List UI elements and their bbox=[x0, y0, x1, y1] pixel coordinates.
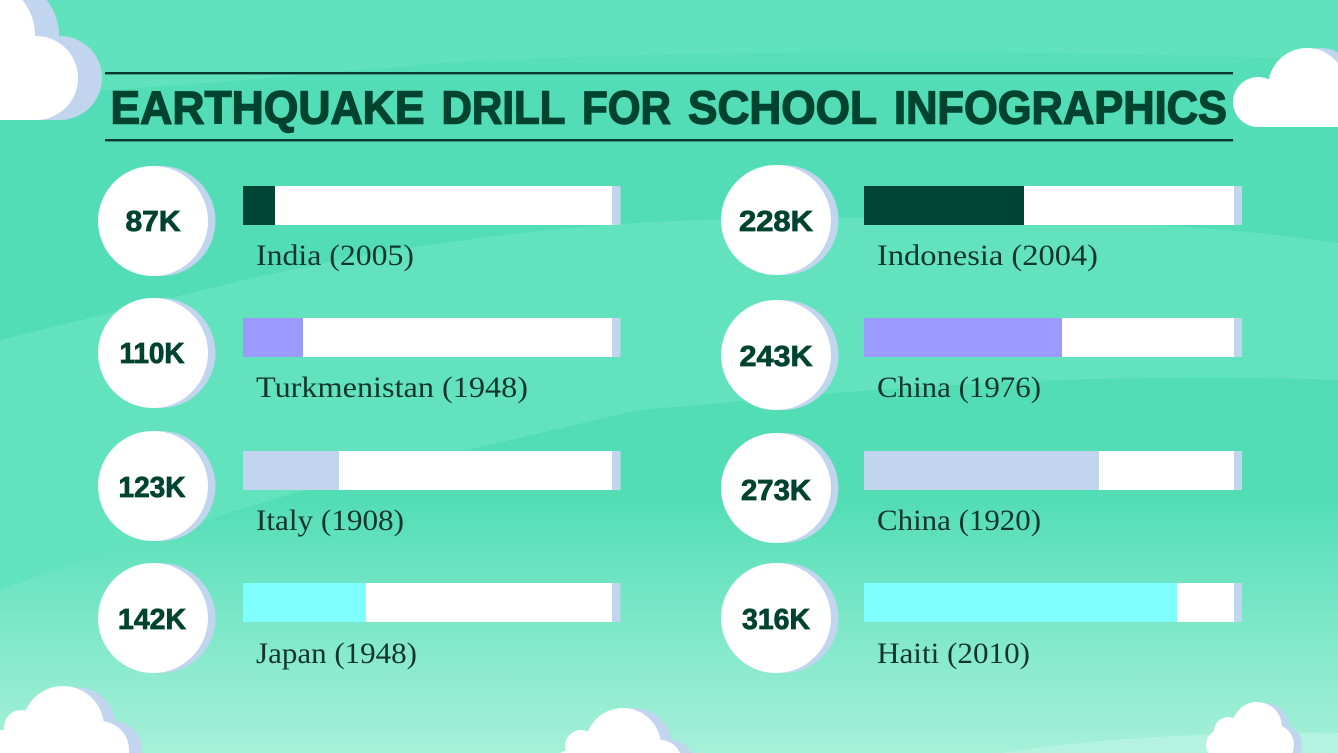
row: India 2005: 87K bbox=[126, 206, 181, 238]
cloud: bottom centre bbox=[553, 708, 693, 753]
cloud: top left bbox=[0, 0, 102, 120]
row: Turkmenistan 1948: Turkmenistan (1948) bbox=[256, 371, 528, 404]
title: SCHOOL bbox=[688, 82, 877, 134]
row: China 1920: China (1920) bbox=[877, 504, 1041, 537]
cloud: bottom left bbox=[0, 686, 142, 753]
row: China 1976: 243K bbox=[740, 341, 813, 373]
row: Turkmenistan 1948: 110K bbox=[120, 338, 185, 370]
row: China 1920 bbox=[721, 433, 1242, 543]
row: India 2005 bbox=[98, 166, 620, 276]
title rule: top bbox=[105, 72, 1233, 74]
row: Indonesia 2004: Indonesia (2004) bbox=[877, 239, 1098, 272]
title bbox=[110, 82, 1227, 134]
row: Japan 1948 bbox=[98, 563, 620, 673]
cloud: bottom right bbox=[1206, 702, 1302, 753]
row: Japan 1948: 142K bbox=[118, 604, 186, 636]
row: China 1976: China (1976) bbox=[877, 371, 1041, 404]
title: FOR bbox=[582, 82, 671, 134]
row: China 1920: 273K bbox=[741, 475, 811, 507]
title rule: bottom bbox=[105, 139, 1233, 141]
row: China 1976 bbox=[721, 300, 1242, 410]
title: EARTHQUAKE bbox=[110, 82, 424, 134]
row: Indonesia 2004: 228K bbox=[739, 206, 813, 238]
row: Haiti 2010: Haiti (2010) bbox=[877, 637, 1030, 670]
row: Italy 1908 bbox=[98, 431, 620, 541]
row: Indonesia 2004 bbox=[721, 165, 1242, 275]
cloud: top right bbox=[1233, 48, 1338, 127]
row: Turkmenistan 1948 bbox=[98, 298, 620, 408]
row: India 2005: India (2005) bbox=[256, 239, 414, 272]
title: INFOGRAPHICS bbox=[894, 82, 1227, 134]
row: Japan 1948: Japan (1948) bbox=[256, 637, 417, 670]
row: Haiti 2010 bbox=[721, 563, 1242, 673]
row: Italy 1908: Italy (1908) bbox=[256, 504, 404, 537]
row: Haiti 2010: 316K bbox=[742, 604, 810, 636]
title: DRILL bbox=[442, 82, 566, 134]
row: Italy 1908: 123K bbox=[118, 472, 186, 504]
